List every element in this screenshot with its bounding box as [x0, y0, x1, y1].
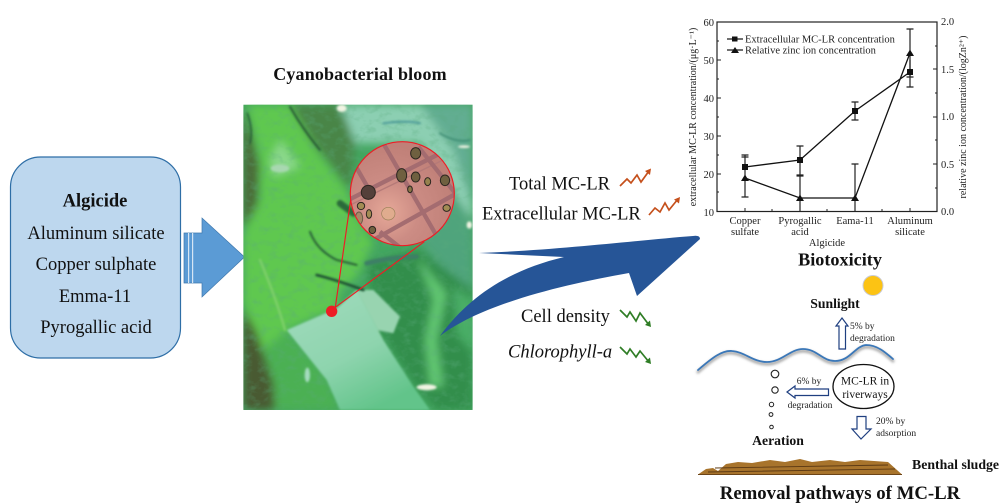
arrow: up to sunlight — [836, 318, 848, 349]
callout lines from sample point — [335, 200, 424, 307]
arrow: left to aeration — [787, 386, 828, 398]
benthal sludge layer — [698, 459, 902, 474]
text: algicide list: Copper sulphate — [36, 255, 156, 275]
text: algicide list: Pyrogallic acid — [40, 318, 152, 338]
y axis ticks and labels: 2.0 — [941, 17, 954, 28]
y axis ticks and labels: 1.0 — [941, 112, 954, 123]
x axis labels: Pyrogallic — [778, 216, 822, 227]
x axis labels: Algicide — [809, 238, 845, 249]
icon: sun — [863, 276, 883, 296]
photo: cyanobacterial bloom — [243, 105, 473, 410]
light water wedge — [287, 290, 430, 410]
text: 6% by degradation: degradation — [788, 401, 833, 411]
text: Chlorophyll-a: Chlorophyll-a — [508, 342, 612, 362]
x axis labels: Eama-11 — [836, 216, 874, 227]
text: 20% by adsorption: adsorption — [876, 429, 916, 439]
text: 6% by degradation — [788, 377, 833, 411]
y axis ticks and labels: 30 — [704, 132, 714, 143]
label: Sunlight: Sunlight — [810, 296, 860, 311]
x axis labels: acid — [791, 227, 809, 238]
y axis ticks and labels: 10 — [704, 208, 714, 219]
water surface wave — [698, 345, 893, 372]
microscope inset — [348, 142, 457, 250]
text: 20% by adsorption — [876, 417, 916, 439]
y axis title right: relative zinc ion concentration/(logZn²⁺) — [958, 36, 969, 198]
text: algicide list: Emma-11 — [59, 287, 131, 307]
text: 6% by degradation: 6% by — [797, 377, 822, 387]
y axis ticks and labels: 40 — [704, 94, 714, 105]
text: Cell density: Cell density — [521, 307, 611, 327]
x axis labels: Copper — [730, 216, 761, 227]
y axis title left: extracellular MC-LR concentration/(μg·L⁻¹) — [688, 28, 699, 206]
icon: falling trend arrow — [620, 310, 651, 327]
legend: Relative zinc ion concentration — [745, 46, 877, 56]
y axis ticks and labels: 1.5 — [941, 65, 954, 76]
y axis ticks and labels: 0.5 — [941, 160, 954, 171]
x axis labels: Aluminum — [887, 216, 933, 227]
y axis ticks and labels: 20 — [704, 170, 714, 181]
ellipse: MC-LR in riverways: riverways — [842, 389, 888, 401]
x axis labels — [730, 216, 933, 249]
y axis ticks and labels — [704, 17, 954, 219]
text: 5% by degradation: degradation — [850, 334, 895, 344]
icon: rising trend arrow 2 — [649, 197, 680, 215]
series: relative zinc ion — [741, 50, 914, 201]
text: algicide list — [27, 224, 165, 338]
icon: falling trend arrow 2 — [620, 347, 651, 364]
y axis ticks and labels: 50 — [704, 56, 714, 67]
icon: sample point — [326, 306, 337, 317]
label: Aeration: Aeration — [752, 433, 804, 448]
icon: rising trend arrow — [620, 168, 651, 186]
text: Total MC-LR: Total MC-LR — [509, 174, 611, 194]
series: extracellular MC-LR — [742, 69, 913, 170]
text: 5% by degradation: 5% by — [850, 322, 875, 332]
label: Benthal sludge: Benthal sludge — [912, 457, 999, 472]
legend — [727, 34, 896, 56]
ellipse: MC-LR in riverways: MC-LR in — [841, 376, 889, 388]
arrow: large curved blue arrow — [440, 236, 700, 336]
y axis ticks and labels: 60 — [704, 18, 714, 29]
legend: Extracellular MC-LR concentration — [745, 34, 896, 46]
ellipse: MC-LR in riverways — [833, 364, 894, 408]
text: 5% by degradation — [850, 322, 895, 344]
text: Extracellular MC-LR: Extracellular MC-LR — [482, 204, 641, 224]
text: 20% by adsorption: 20% by — [876, 417, 906, 427]
heading: Biotoxicity: Biotoxicity — [798, 250, 882, 270]
x axis labels: silicate — [895, 227, 925, 238]
x axis labels: sulfate — [731, 227, 759, 238]
bubbles: aeration — [769, 370, 779, 429]
heading: Cyanobacterial bloom: Cyanobacterial bloom — [273, 64, 447, 84]
text: algicide list: Aluminum silicate — [27, 224, 165, 244]
panel: algicide box — [10, 157, 180, 358]
heading: Algicide: Algicide — [63, 192, 127, 212]
y axis ticks and labels: 0.0 — [941, 207, 954, 218]
error bars — [742, 29, 914, 211]
chart: extracellular MC-LR and zinc ion concentration — [688, 17, 969, 249]
arrow: algicide to bloom — [184, 218, 244, 297]
heading: Removal pathways of MC-LR: Removal pathways of MC-LR — [720, 483, 961, 504]
arrow: down to sludge — [852, 416, 871, 439]
